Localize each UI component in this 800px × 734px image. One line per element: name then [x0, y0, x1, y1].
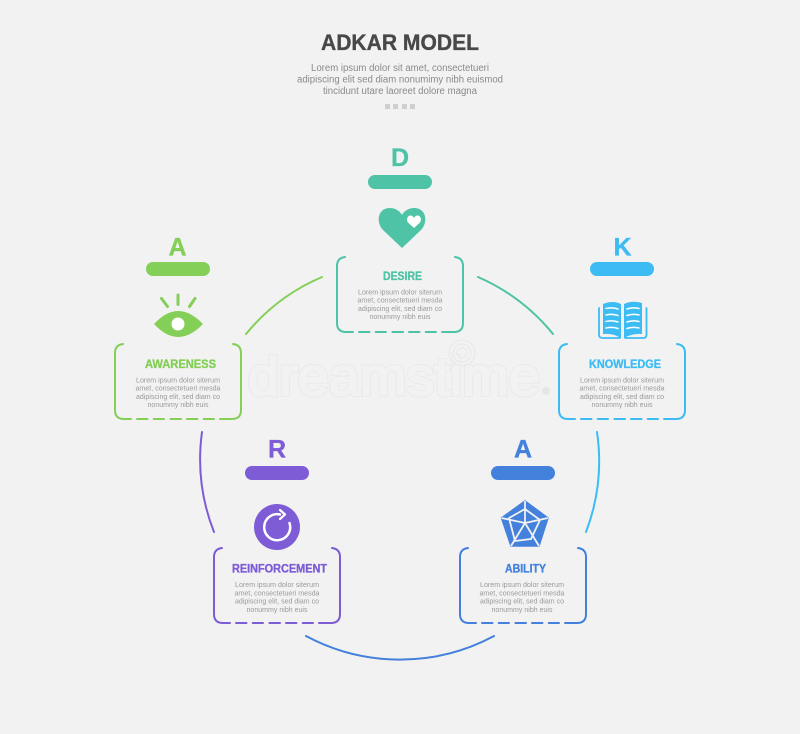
body text: adipiscing elit, sed diam co	[235, 599, 319, 606]
body text: nonummy nibh euis	[148, 402, 209, 409]
icon: heart	[379, 208, 425, 248]
arc: awareness to desire	[246, 277, 322, 334]
body text: adipiscing elit, sed diam co	[480, 599, 564, 606]
box outline	[460, 548, 586, 623]
body text: amet, consectetueri mesda	[580, 386, 665, 393]
box outline	[115, 344, 241, 419]
letter D: D	[391, 144, 409, 172]
panel: knowledge	[559, 234, 685, 419]
panel: reinforcement	[214, 436, 340, 623]
icon: refresh circle	[254, 504, 300, 550]
watermark: dreamstime	[248, 347, 540, 407]
heading: DESIRE	[383, 269, 422, 283]
pill	[590, 262, 654, 276]
letter R: R	[268, 436, 286, 464]
icon: pentagon radar	[502, 501, 548, 546]
pill	[146, 262, 210, 276]
body text: amet, consectetueri mesda	[358, 298, 443, 305]
body text: Lorem ipsum dolor siterum	[235, 582, 319, 589]
body text	[136, 377, 221, 409]
icon: eye	[154, 295, 203, 337]
intro text block: Lorem ipsum dolor sit amet, consectetueri	[311, 63, 489, 74]
body text: adipiscing elit, sed diam co	[580, 394, 664, 401]
title: ADKAR MODEL	[321, 30, 479, 55]
body text: adipiscing elit, sed diam co	[136, 394, 220, 401]
body text: amet, consectetueri mesda	[480, 590, 565, 597]
body text: Lorem ipsum dolor siterum	[136, 377, 220, 384]
body text: Lorem ipsum dolor siterum	[480, 582, 564, 589]
letter A: A	[168, 234, 187, 262]
body text	[358, 289, 443, 321]
letter K: K	[613, 234, 632, 262]
body text: nonummy nibh euis	[492, 607, 553, 614]
body text	[480, 582, 565, 614]
box outline	[337, 257, 463, 332]
intro text block: adipiscing elit sed diam nonumimy nibh euismod	[297, 74, 503, 86]
heading: REINFORCEMENT	[232, 562, 328, 576]
heading: AWARENESS	[145, 357, 216, 371]
heading: KNOWLEDGE	[589, 357, 661, 371]
icon: open book	[599, 302, 646, 338]
pill	[368, 175, 432, 189]
body text: Lorem ipsum dolor siterum	[580, 377, 664, 384]
arc: knowledge to ability	[586, 432, 599, 532]
body text	[234, 582, 320, 614]
box outline	[559, 344, 685, 419]
pill	[491, 466, 555, 480]
body text: amet, consectetueri mesda	[136, 386, 221, 393]
panel: ability	[460, 436, 586, 623]
panel: desire	[337, 144, 463, 332]
panel: awareness	[115, 234, 241, 419]
body text	[580, 377, 665, 409]
body text: nonummy nibh euis	[592, 402, 653, 409]
pagination dots	[385, 104, 415, 109]
arc: ability to reinforcement	[306, 636, 494, 660]
arc: reinforcement to awareness	[200, 432, 214, 532]
cycle arcs	[200, 277, 599, 660]
heading: ABILITY	[505, 562, 546, 576]
body text: nonummy nibh euis	[370, 314, 431, 321]
body text: amet, consectetueri mesda	[234, 590, 320, 597]
box outline	[214, 548, 340, 623]
body text: adipiscing elit, sed diam co	[358, 306, 442, 313]
pill	[245, 466, 309, 480]
letter A: A	[514, 436, 532, 464]
watermark: dreamstime	[248, 347, 540, 407]
arc: desire to knowledge	[478, 277, 553, 334]
intro text block: tincidunt utare laoreet dolore magna	[323, 86, 477, 97]
intro text block	[297, 63, 503, 97]
body text: Lorem ipsum dolor siterum	[358, 289, 442, 296]
body text: nonummy nibh euis	[246, 607, 308, 614]
